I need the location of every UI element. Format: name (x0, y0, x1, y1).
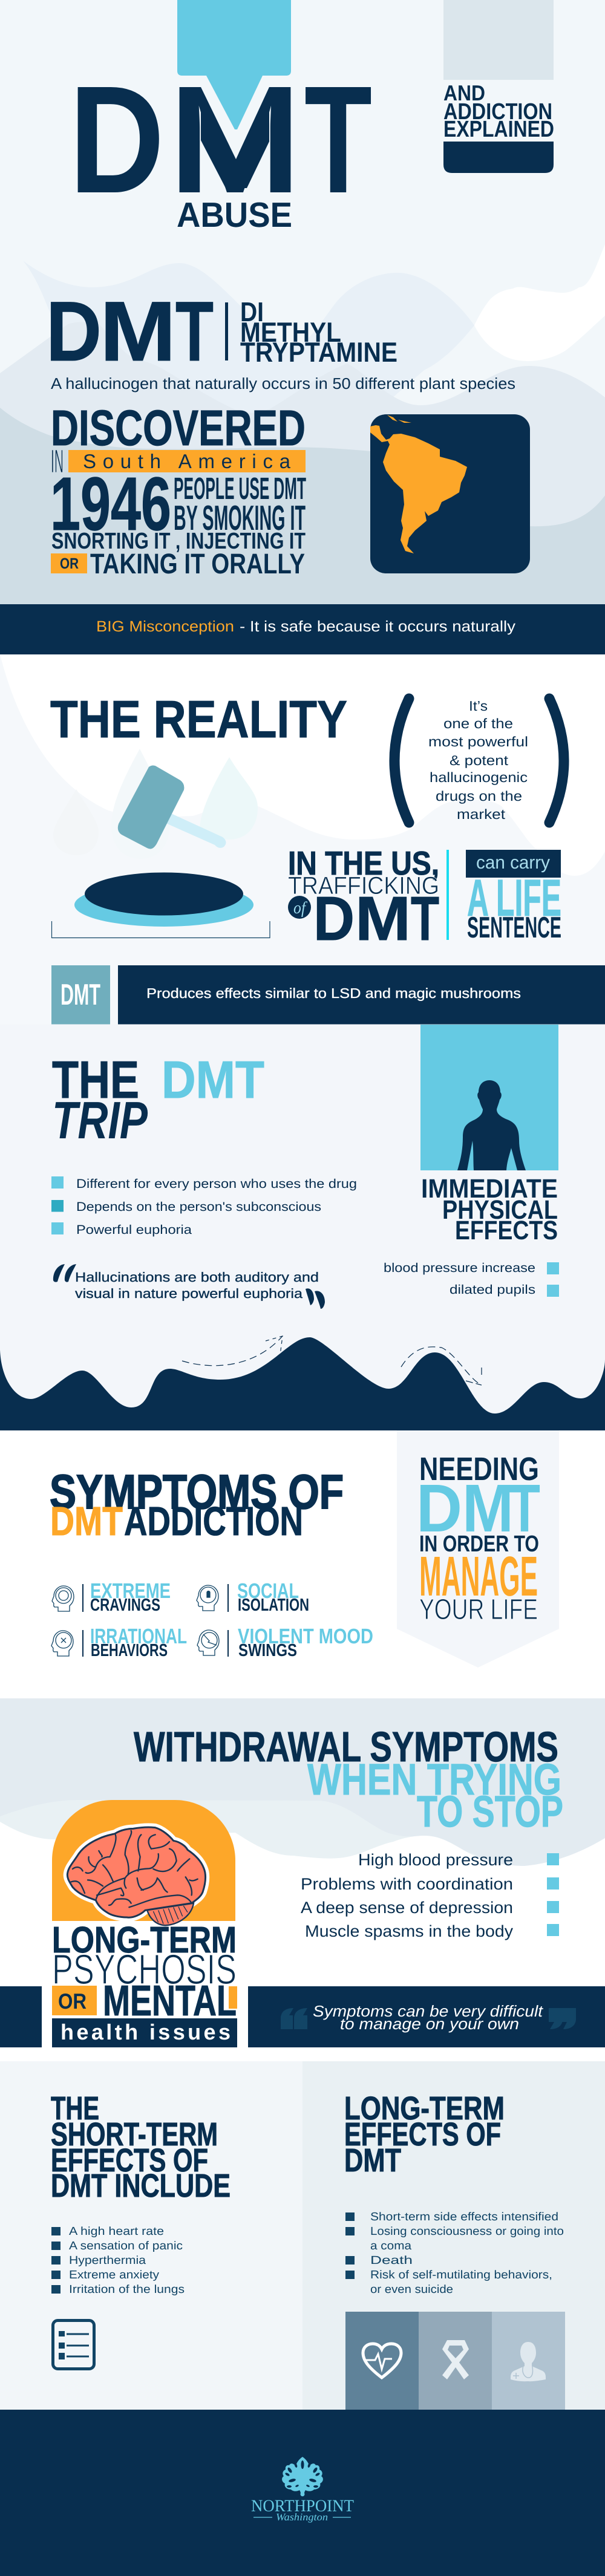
list: short-term effects: Hyperthermia (69, 2254, 146, 2267)
text block: discovered in South America: DISCOVERED (51, 400, 306, 456)
text block: discovered in South America (50, 400, 306, 579)
symptom: irrational behaviors: BEHAVIORS (91, 1641, 168, 1660)
banner: effects similar to LSD: DMT (60, 979, 100, 1011)
heading: long-term effects: EFFECTS OF (344, 2116, 501, 2153)
text: hallucinogen description: A hallucinogen that naturally occurs in 50 different plant species (51, 374, 515, 393)
title: DMT with cyan pointer: M (169, 54, 301, 225)
text block: long-term psychosis or mental health issues: OR (58, 1989, 87, 2014)
logo: Northpoint peacock (282, 2457, 323, 2496)
panel: symptoms of addiction (0, 1430, 605, 1698)
callout: most powerful hallucinogenic drugs: It’s (469, 698, 488, 714)
list: long-term effects (345, 2211, 564, 2296)
icon: heart with pulse (345, 2312, 419, 2410)
panel: withdrawal symptoms (0, 1698, 605, 2061)
panel: footer (0, 2410, 605, 2576)
heading: short-term effects: SHORT-TERM (51, 2116, 218, 2153)
heading: DMT dimethyltryptamine: DI (240, 296, 264, 327)
heading: the DMT trip (52, 1051, 264, 1150)
list: trip characteristics: Powerful euphoria (76, 1223, 192, 1237)
symptom: social isolation: ISOLATION (238, 1596, 309, 1615)
heading: long-term effects (344, 2090, 505, 2179)
text block: discovered in South America: IN (51, 443, 64, 480)
callout: most powerful hallucinogenic drugs: drugs on the (436, 788, 522, 804)
banner: big misconception (0, 604, 605, 654)
callout: most powerful hallucinogenic drugs (394, 698, 564, 823)
quote: hallucinations (53, 1264, 325, 1309)
symptom: irrational behaviors: IRRATIONAL (90, 1625, 187, 1648)
symptom: social isolation (197, 1579, 309, 1615)
text block: discovered in South America: 1946 (50, 462, 171, 546)
text block: trafficking in the US: of (293, 899, 307, 918)
heading: the DMT trip: DMT (162, 1051, 264, 1109)
panel: short-term effects (0, 2061, 302, 2410)
text block: long-term psychosis or mental health issues: health issues (60, 2020, 231, 2044)
callout: most powerful hallucinogenic drugs: one of the (443, 716, 513, 731)
title: DMT with cyan pointer: T (304, 54, 372, 225)
callout: needing DMT banner: YOUR LIFE (419, 1594, 538, 1626)
list: long-term effects: a coma (370, 2240, 411, 2252)
text block: long-term psychosis or mental health issues: MENTAL (103, 1977, 237, 2025)
logo text: Northpoint Washington: NORTHPOINT (251, 2497, 354, 2516)
arrow: rising dashed path (182, 1336, 283, 1366)
title: DMT with cyan pointer: D (69, 54, 165, 225)
quote: hallucinations: Hallucinations are both auditory and (75, 1270, 319, 1285)
banner: and addiction explained: ADDICTION (443, 99, 552, 125)
symptom: social isolation: SOCIAL (237, 1579, 299, 1603)
callout: needing DMT banner: D (416, 1470, 462, 1546)
callout: most powerful hallucinogenic drugs: market (457, 806, 506, 822)
panel: hero and what is DMT (0, 0, 605, 605)
icon: human silhouette (420, 1025, 558, 1170)
text block: trafficking in the US: D (313, 884, 355, 953)
banner: and addiction explained: AND (443, 80, 485, 105)
banner: quote on managing symptoms: Symptoms can be very difficult (313, 2002, 544, 2020)
banner: big misconception: BIG Misconception (96, 618, 234, 635)
callout: needing DMT banner: M (462, 1470, 514, 1546)
heading: the DMT trip: THE (52, 1051, 139, 1109)
list: long-term effects: Losing consciousness or going into (370, 2225, 564, 2238)
quote: hallucinations: visual in nature powerful euphoria (75, 1286, 303, 1301)
list: trip characteristics (51, 1176, 357, 1237)
banner: big misconception: - It is safe because it occurs naturally (240, 618, 516, 635)
panel: long-term effects (302, 2061, 605, 2410)
heading: the DMT trip: TRIP (52, 1091, 148, 1150)
callout: needing DMT banner (397, 1430, 559, 1668)
list: withdrawal symptoms: Muscle spasms in the body (305, 1922, 514, 1940)
logo text: Northpoint Washington: Washington (276, 2511, 328, 2523)
text block: long-term psychosis or mental health issues: LONG-TERM (52, 1919, 237, 1960)
banner: and addiction explained (443, 0, 554, 173)
heading: DMT dimethyltryptamine: M (100, 284, 176, 379)
panel: the reality (0, 654, 605, 1025)
banner: effects similar to LSD (51, 965, 605, 1025)
heading: immediate physical effects: PHYSICAL (442, 1195, 558, 1225)
text block: trafficking in the US: can carry (476, 853, 550, 873)
heading: short-term effects (51, 2090, 231, 2204)
map: South America (370, 414, 530, 573)
banner: navy band left (0, 1986, 42, 2047)
heading: short-term effects: DMT INCLUDE (51, 2168, 231, 2204)
banner: quote on managing symptoms: to manage on your own (340, 2015, 519, 2033)
heading: the reality: THE REALITY (50, 690, 347, 749)
heading: immediate physical effects (421, 1174, 558, 1245)
list: physical effects: blood pressure increase (384, 1261, 535, 1275)
heading: DMT dimethyltryptamine (46, 284, 397, 379)
icon: awareness ribbon (419, 2312, 492, 2410)
symptom: extreme cravings (52, 1579, 171, 1615)
list: short-term effects: Extreme anxiety (69, 2269, 160, 2281)
list: long-term effects: Death (370, 2254, 413, 2267)
list: long-term effects: Short-term side effects intensified (370, 2211, 558, 2223)
heading: immediate physical effects: EFFECTS (455, 1216, 558, 1245)
icon: checklist (53, 2320, 94, 2369)
heading: withdrawal symptoms when trying to stop (134, 1723, 563, 1836)
list: short-term effects (51, 2225, 185, 2296)
text block: long-term psychosis or mental health issues: PSYCHOSIS (52, 1946, 237, 1993)
list: short-term effects: Irritation of the lungs (69, 2283, 185, 2296)
heading: DMT dimethyltryptamine: METHYL (240, 316, 341, 348)
text block: trafficking in the US: M (355, 884, 411, 953)
list: long-term effects: Risk of self-mutilating behaviors, (370, 2269, 552, 2281)
heading: DMT dimethyltryptamine: TRYPTAMINE (240, 336, 397, 368)
callout: most powerful hallucinogenic drugs: most powerful (428, 734, 528, 749)
list: withdrawal symptoms: Problems with coordination (301, 1875, 513, 1893)
text block: trafficking in the US: T (411, 884, 439, 953)
list: long-term effects: or even suicide (370, 2283, 453, 2296)
heading: symptoms of DMT addiction (50, 1465, 344, 1544)
symptom: violent mood swings: SWINGS (238, 1641, 297, 1660)
icon: brain on orange arch (52, 1800, 235, 1925)
symptom: extreme cravings: CRAVINGS (90, 1596, 160, 1615)
text block: trafficking in the US: IN THE US, (288, 844, 439, 882)
text block: long-term psychosis or mental health issues (52, 1919, 237, 2047)
list: short-term effects: A high heart rate (69, 2225, 164, 2238)
callout: needing DMT banner: NEEDING (419, 1451, 539, 1487)
symptom: extreme cravings: EXTREME (90, 1579, 171, 1603)
icon: gavel with drops (52, 749, 270, 937)
text block: discovered in South America: SNORTING IT , INJECTING IT (51, 529, 306, 554)
heading: symptoms of DMT addiction: DMT (50, 1499, 123, 1544)
heading: long-term effects: DMT (344, 2142, 401, 2179)
callout: needing DMT banner: T (509, 1470, 540, 1546)
list: trip characteristics: Different for every person who uses the drug (76, 1177, 357, 1191)
list: short-term effects: A sensation of panic (69, 2240, 183, 2252)
heading: DMT dimethyltryptamine: D (46, 284, 102, 379)
symptom: irrational behaviors (51, 1625, 187, 1660)
list: withdrawal symptoms: A deep sense of depression (301, 1899, 513, 1917)
banner: and addiction explained: EXPLAINED (443, 117, 554, 142)
heading: symptoms of DMT addiction: SYMPTOMS OF (50, 1465, 344, 1519)
chart: mountain waves (0, 1337, 605, 1430)
panel: hero and what is DMT: PEOPLE USE DMT (174, 471, 306, 506)
callout: most powerful hallucinogenic drugs: & potent (450, 752, 509, 768)
heading: DMT dimethyltryptamine: T (175, 284, 214, 379)
symptom: violent mood swings (197, 1625, 373, 1660)
panel: the DMT trip (0, 1025, 605, 1431)
subtitle: abuse: ABUSE (177, 195, 292, 235)
heading: withdrawal symptoms when trying to stop: TO STOP (417, 1787, 563, 1836)
list: withdrawal symptoms (301, 1851, 559, 1940)
heading: short-term effects: THE (51, 2090, 99, 2127)
list: trip characteristics: Depends on the person's subconscious (76, 1200, 321, 1214)
list: withdrawal symptoms: High blood pressure (358, 1851, 513, 1869)
text block: discovered in South America: South America (83, 450, 291, 472)
heading: symptoms of DMT addiction: ADDICTION (124, 1499, 303, 1544)
icon: doctor (492, 2312, 565, 2410)
symptom: violent mood swings: VIOLENT MOOD (238, 1625, 373, 1648)
text block: discovered in South America: TAKING IT ORALLY (90, 547, 305, 579)
heading: long-term effects: LONG-TERM (344, 2090, 505, 2127)
title: DMT with cyan pointer (69, 0, 372, 225)
arrow: falling dashed path (401, 1347, 482, 1385)
panel: hero and what is DMT: BY SMOKING IT (174, 498, 306, 538)
logo text: Northpoint Washington (251, 2497, 354, 2523)
callout: needing DMT banner: IN ORDER TO (419, 1531, 539, 1557)
heading: immediate physical effects: IMMEDIATE (421, 1174, 558, 1204)
list: physical effects: dilated pupils (450, 1283, 535, 1297)
list: physical effects (384, 1261, 559, 1297)
callout: most powerful hallucinogenic drugs: hallucinogenic (430, 769, 528, 785)
banner: effects similar to LSD: Produces effects similar to LSD and magic mushrooms (146, 985, 521, 1001)
text block: trafficking in the US: TRAFFICKING (288, 872, 439, 899)
text block: trafficking in the US (288, 844, 561, 953)
heading: short-term effects: EFFECTS OF (51, 2142, 208, 2179)
text block: discovered in South America: OR (60, 555, 79, 572)
banner: quote on managing symptoms (248, 1986, 605, 2047)
